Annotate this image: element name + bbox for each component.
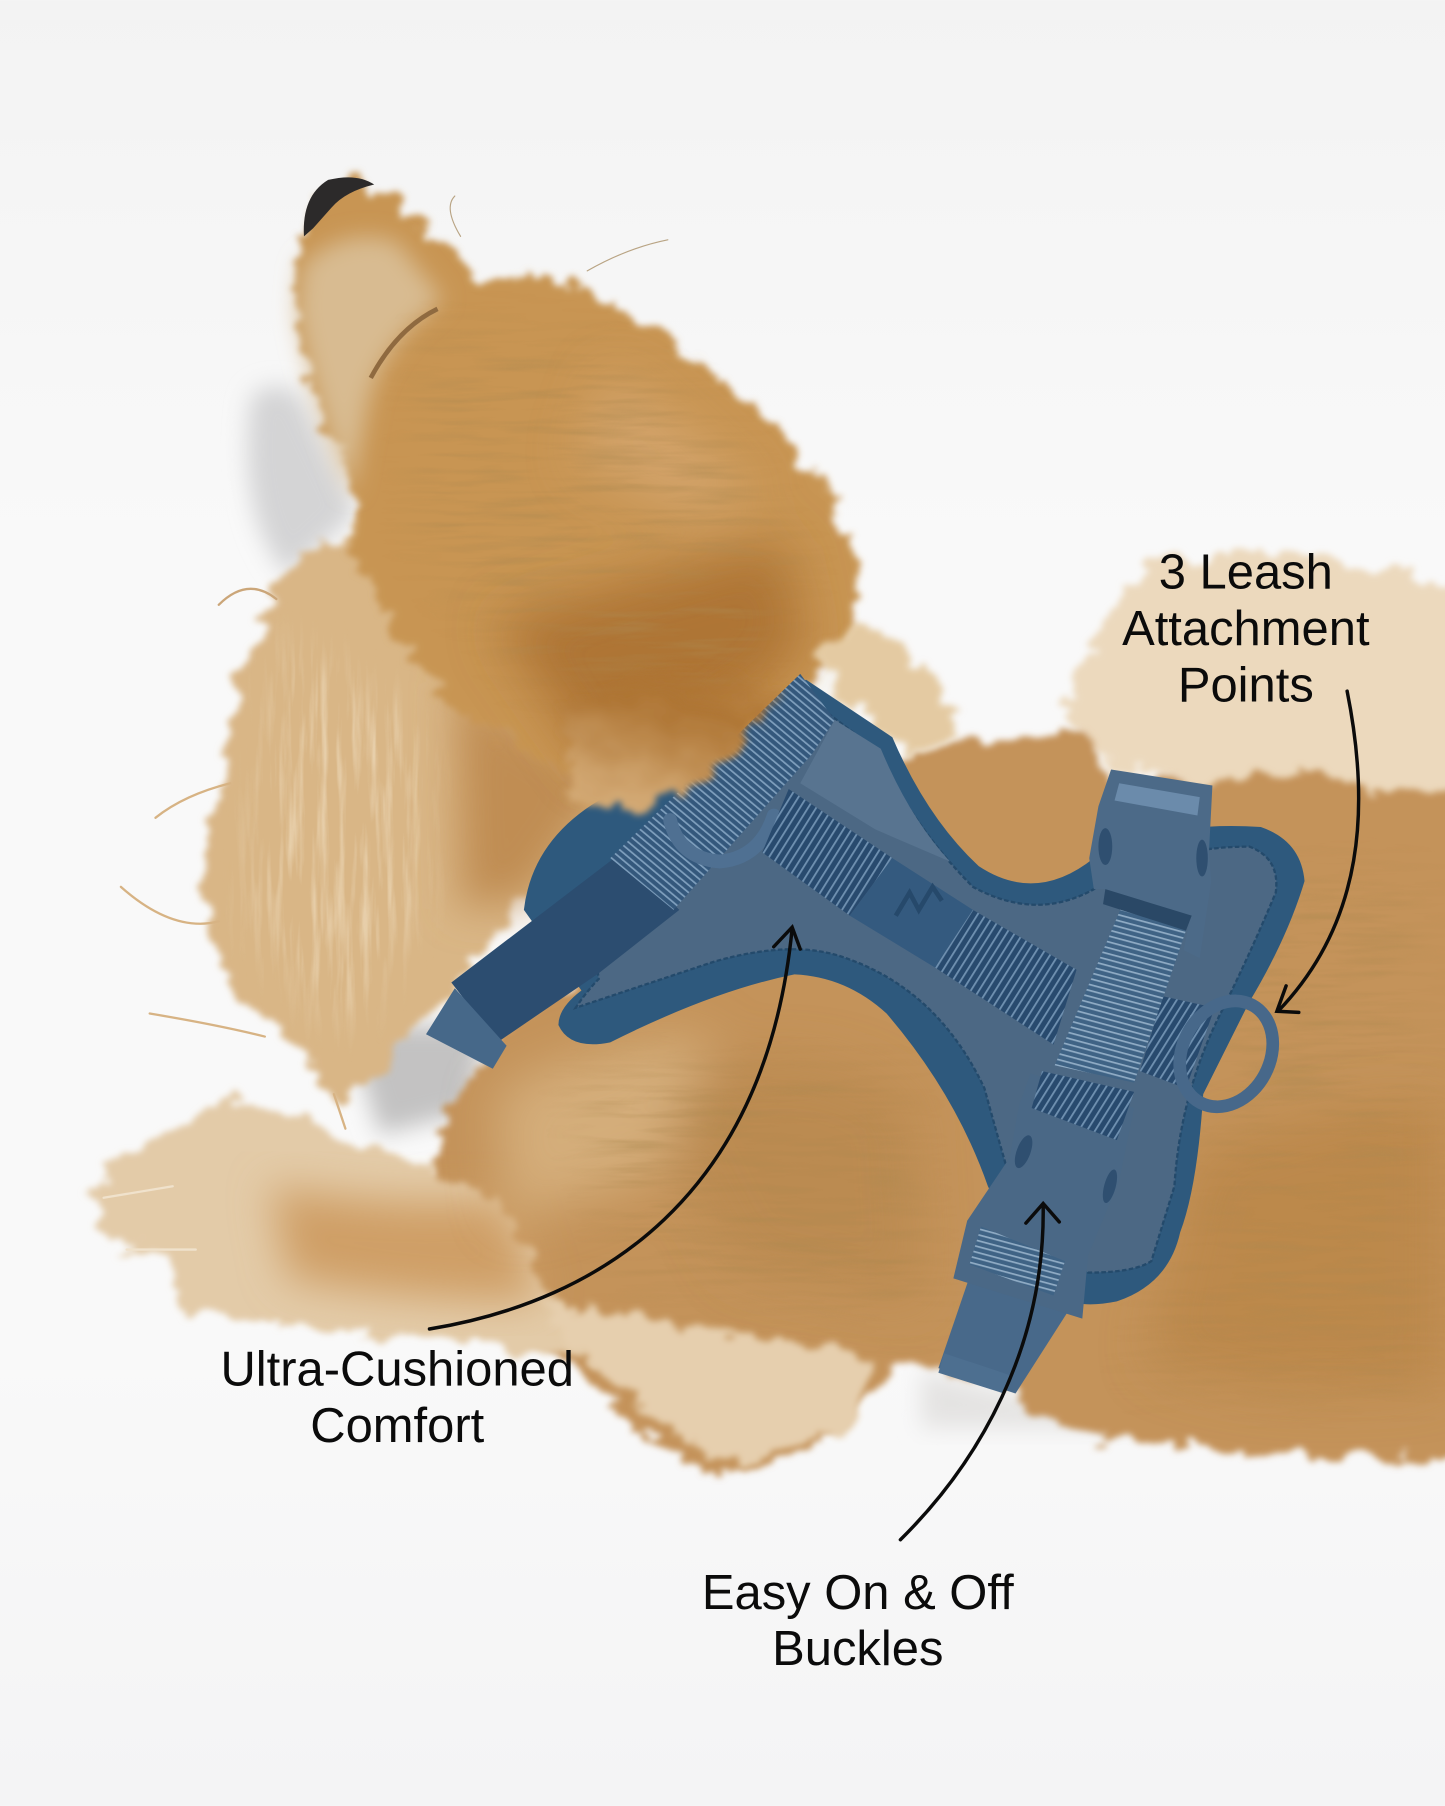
label: easy on and off buckles [702, 1566, 1014, 1676]
dog: rear light fur [1065, 550, 1445, 829]
infographic: harness on dog [84, 166, 1445, 1666]
dog: nose [304, 177, 374, 236]
arrow: leash points [1277, 691, 1359, 1012]
label: 3 leash attachment points: Attachment [1122, 602, 1370, 656]
harness: back strap left [762, 789, 892, 916]
dog: front leg and paw [86, 1100, 599, 1359]
dog: head and neck [296, 181, 858, 806]
harness: padded outer body [524, 680, 1305, 1304]
dog: leg warm shading [271, 1186, 541, 1301]
harness: vertical strap [1055, 904, 1186, 1083]
harness: lower buckle [953, 1073, 1134, 1319]
harness [426, 674, 1305, 1393]
dog: fur grain on head and body [433, 360, 1384, 1183]
harness: strap end tab [938, 1353, 1013, 1393]
harness: small slider [426, 988, 507, 1069]
dog: ear grain [240, 651, 420, 1026]
label: ultra-cushioned comfort [220, 1342, 574, 1453]
label: 3 leash attachment points: 3 Leash [1159, 546, 1333, 600]
label: 3 leash attachment points: Points [1178, 659, 1314, 713]
dog: dark fur shading [495, 369, 1445, 1390]
harness: inner grey panel [576, 714, 1276, 1273]
harness: logo patch [850, 858, 973, 967]
harness: rear D-ring webbing [1140, 996, 1215, 1088]
dog: chest light fur [541, 1301, 875, 1465]
harness: top buckle slot [1103, 889, 1192, 931]
harness: rear D-ring [1162, 984, 1291, 1123]
dog illustration [84, 168, 1445, 1536]
dog: closed eye [371, 309, 438, 378]
harness: lower buckle window [969, 1227, 1065, 1296]
harness: top buckle window [1115, 783, 1200, 815]
dog: body [415, 731, 1445, 1474]
dog: fur strands [104, 196, 668, 1250]
arrow: cushioned comfort [429, 927, 800, 1329]
label: easy on and off buckles: Buckles [772, 1622, 943, 1676]
harness: lower strap [938, 1267, 1071, 1393]
harness: neck strap striped section [610, 674, 835, 910]
harness: top buckle [1089, 769, 1212, 958]
dog: curly shoulder fur [817, 628, 961, 754]
label: 3 leash attachment points [1122, 546, 1370, 713]
harness: back strap right [935, 910, 1077, 1045]
dog: long ear fur [206, 507, 610, 1106]
dog: ear warm inner fur [455, 680, 610, 910]
dog: neck fur overlapping harness [564, 639, 794, 812]
harness: lighter panel highlight [800, 720, 950, 862]
harness: neck strap dark section [451, 852, 679, 1042]
label: ultra-cushioned comfort: Ultra-Cushioned [220, 1342, 574, 1396]
label: easy on and off buckles: Easy On & Off [702, 1566, 1014, 1620]
harness: ring at neck [670, 815, 774, 862]
harness: lower strap entering buckle [1032, 1071, 1134, 1140]
arrow: buckles [900, 1204, 1059, 1540]
shadow behind dog [248, 386, 1151, 1428]
dog: snout highlight [297, 237, 443, 495]
label: ultra-cushioned comfort: Comfort [310, 1399, 485, 1453]
